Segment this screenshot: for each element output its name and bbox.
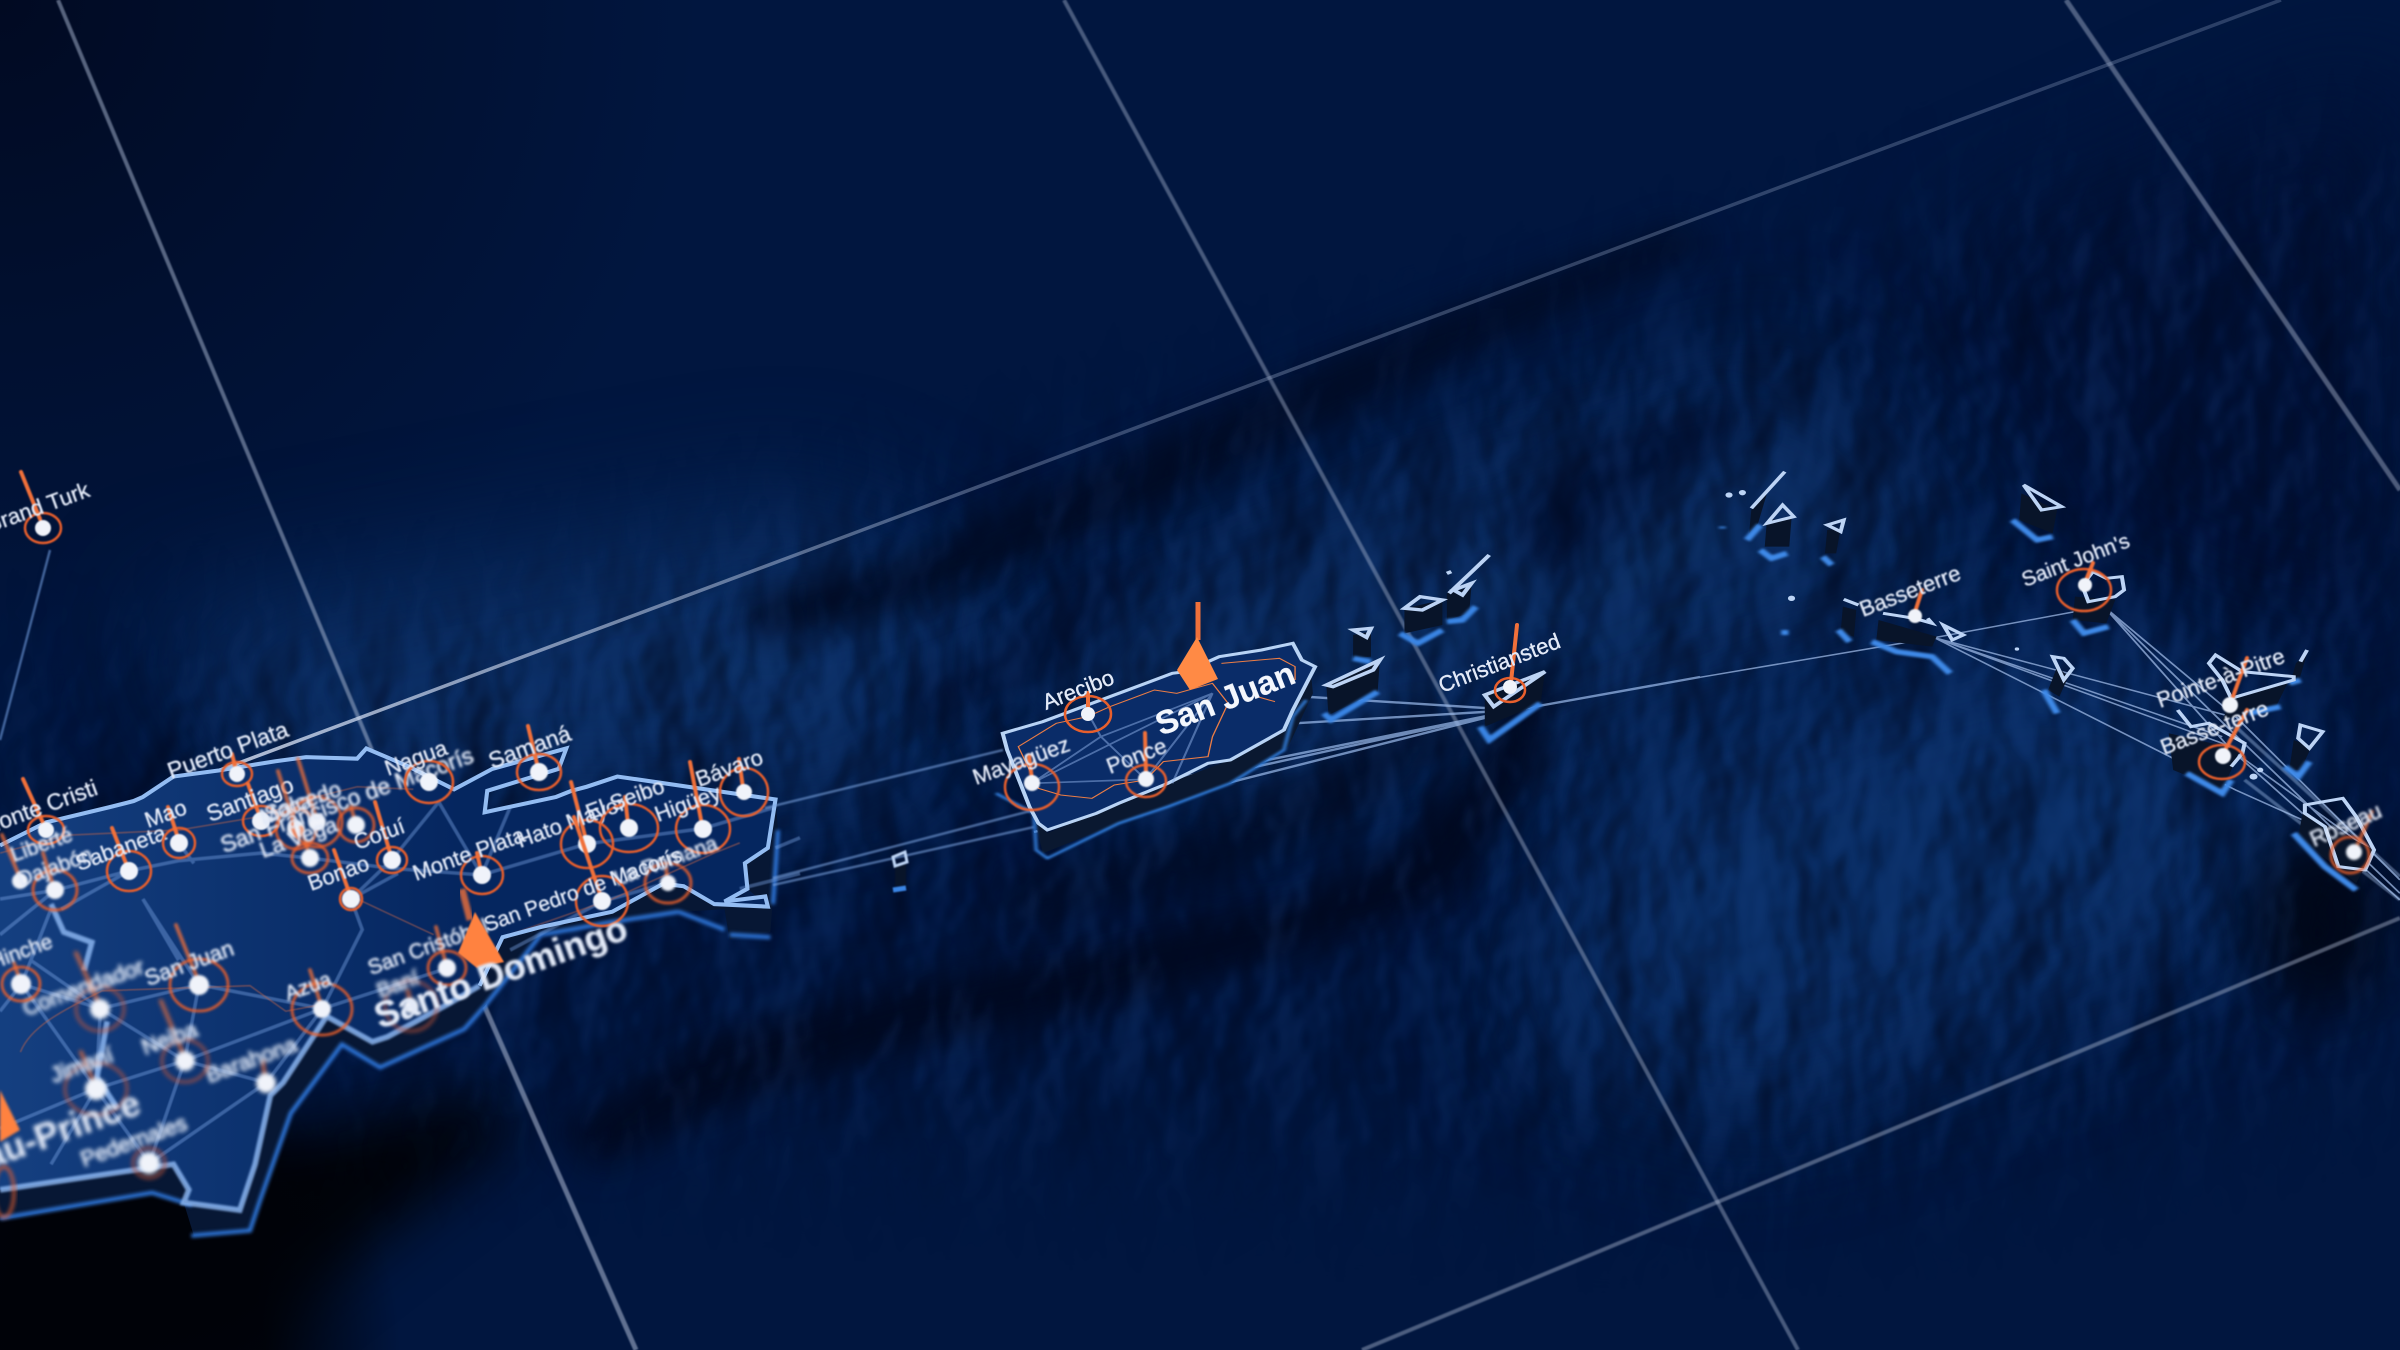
Puerto Rico road mesh [1032, 693, 1212, 783]
city: Arecibo: Arecibo [1039, 665, 1117, 715]
routes: Lesser Antilles [1700, 607, 2400, 900]
city: Jimaní [47, 1042, 127, 1115]
city: San Juan de la Maguana: San Juan [141, 935, 237, 991]
city: Higüey: Higüey [651, 780, 724, 827]
city: Hinche [0, 930, 56, 1001]
route: Grand Turk spoke [0, 550, 50, 740]
city: San Francisco de Macorís: San Francisco de Macorís [217, 742, 477, 858]
city: Basseterre: Basseterre [1856, 560, 1964, 622]
city: Mao: Mao [141, 795, 190, 833]
city: Hato Mayor: Hato Mayor [513, 790, 629, 853]
capital marker: Santo Domingo [458, 889, 504, 968]
city: Pedernales: Pedernales [77, 1110, 190, 1172]
city: Roseau: Roseau [2306, 798, 2385, 852]
island land surface [0, 748, 776, 1210]
city: Moca: Moca [256, 788, 316, 830]
road mesh [0, 802, 800, 1164]
grid line: left meridian [58, 0, 636, 1350]
island wall glow [0, 830, 778, 1236]
city: San Cristóbal: San Cristóbal [365, 915, 491, 980]
city: Santiago: Santiago [203, 771, 297, 827]
city: Salcedo: Salcedo [261, 776, 344, 827]
city: Liberté [2, 823, 76, 889]
city: El Seibo: El Seibo [582, 773, 668, 825]
city: Azua: Azua [282, 968, 335, 1006]
city: El Seibo [582, 773, 668, 852]
city: Saint John's: Saint John's [2019, 529, 2133, 592]
city: Monte Plata: Monte Plata [409, 822, 529, 886]
city: San Juan de la Maguana [141, 925, 237, 1011]
province borders [0, 787, 740, 1052]
city: Comendador: Comendador [19, 954, 147, 1021]
island coastline southwest [0, 904, 480, 1210]
island west haze [0, 748, 454, 1210]
city: Dajabón: Dajabón [14, 843, 96, 891]
city: Bonao: Bonao [304, 850, 372, 896]
city: Azua [282, 968, 352, 1035]
routes: Hispaniola to Puerto Rico [765, 750, 1034, 885]
city: Mao [141, 795, 195, 858]
city: La Romana: La Romana [611, 832, 721, 891]
city: Neiba: Neiba [138, 1016, 201, 1060]
island glows [1324, 607, 1541, 740]
small islets [1725, 490, 2263, 780]
panel: Puerto Rico island [996, 643, 1315, 858]
city: San Pedro de Macorís: San Pedro de Macorís [481, 844, 685, 937]
island walls [1326, 587, 1545, 727]
Puerto Rico district border [1018, 658, 1295, 798]
city: Sabaneta: Sabaneta [72, 820, 170, 876]
capital marker: San Juan [1177, 602, 1218, 690]
city: Puerto Plata: Puerto Plata [164, 716, 292, 784]
city: Salcedo [261, 759, 344, 847]
city: Samaná: Samaná [485, 720, 574, 774]
routes: Puerto Rico to Christiansted [1034, 677, 1700, 832]
city: Bávaro [692, 744, 768, 816]
city: Nagua [381, 735, 453, 803]
city: Bávaro: Bávaro [692, 744, 766, 792]
island walls [1749, 493, 2374, 883]
city: La Vega: La Vega [256, 811, 341, 863]
city: Neiba [138, 1001, 208, 1082]
capital marker: Port-au-Prince [0, 1090, 20, 1142]
city: Cotuí [350, 802, 408, 873]
island extruded wall [0, 799, 778, 1236]
city: Christiansted: Christiansted [1435, 628, 1564, 698]
panel: Hispaniola island [0, 748, 800, 1236]
Puerto Rico wall glow [996, 700, 1306, 858]
Puerto Rico wall [1034, 670, 1313, 853]
Puerto Rico land surface [1003, 643, 1315, 830]
panel: Virgin Islands and Vieques [1324, 555, 1545, 740]
capital label: Santo Domingo: Santo Domingo [369, 907, 633, 1037]
city: Mayagüez: Mayagüez [969, 731, 1073, 790]
island glows [1722, 520, 2356, 890]
island outlines [1326, 555, 1545, 707]
city: Cotuí: Cotuí [350, 813, 408, 855]
panel: Lesser Antilles islands [1722, 472, 2374, 890]
city: Basse-terre: Basse-terre [2157, 696, 2272, 760]
island: Mona [893, 852, 907, 890]
ring: partial at left edge [0, 1167, 14, 1217]
grid line: center meridian [1064, 0, 1798, 1350]
grid line: north parallel [220, 0, 2281, 770]
city: Higüey [651, 762, 730, 853]
city: Jimaní: Jimaní [47, 1042, 117, 1088]
city: Barahona: Barahona [202, 1031, 301, 1088]
city: Ponce: Ponce [1103, 733, 1170, 779]
capital label: San Juan: San Juan [1150, 654, 1300, 743]
grid line: south parallel [1362, 918, 2400, 1350]
city: Liberté: Liberté [7, 823, 76, 867]
city: Pointe-à-Pitre: Pointe-à-Pitre [2153, 643, 2288, 713]
city: Baní [374, 966, 437, 1031]
island outlines [1751, 472, 2374, 870]
grid line: right meridian [2066, 0, 2400, 490]
city: Baní: Baní [374, 966, 422, 1003]
city: Moca [256, 771, 316, 849]
island coastline [0, 748, 776, 986]
city: Nagua: Nagua [381, 735, 451, 781]
